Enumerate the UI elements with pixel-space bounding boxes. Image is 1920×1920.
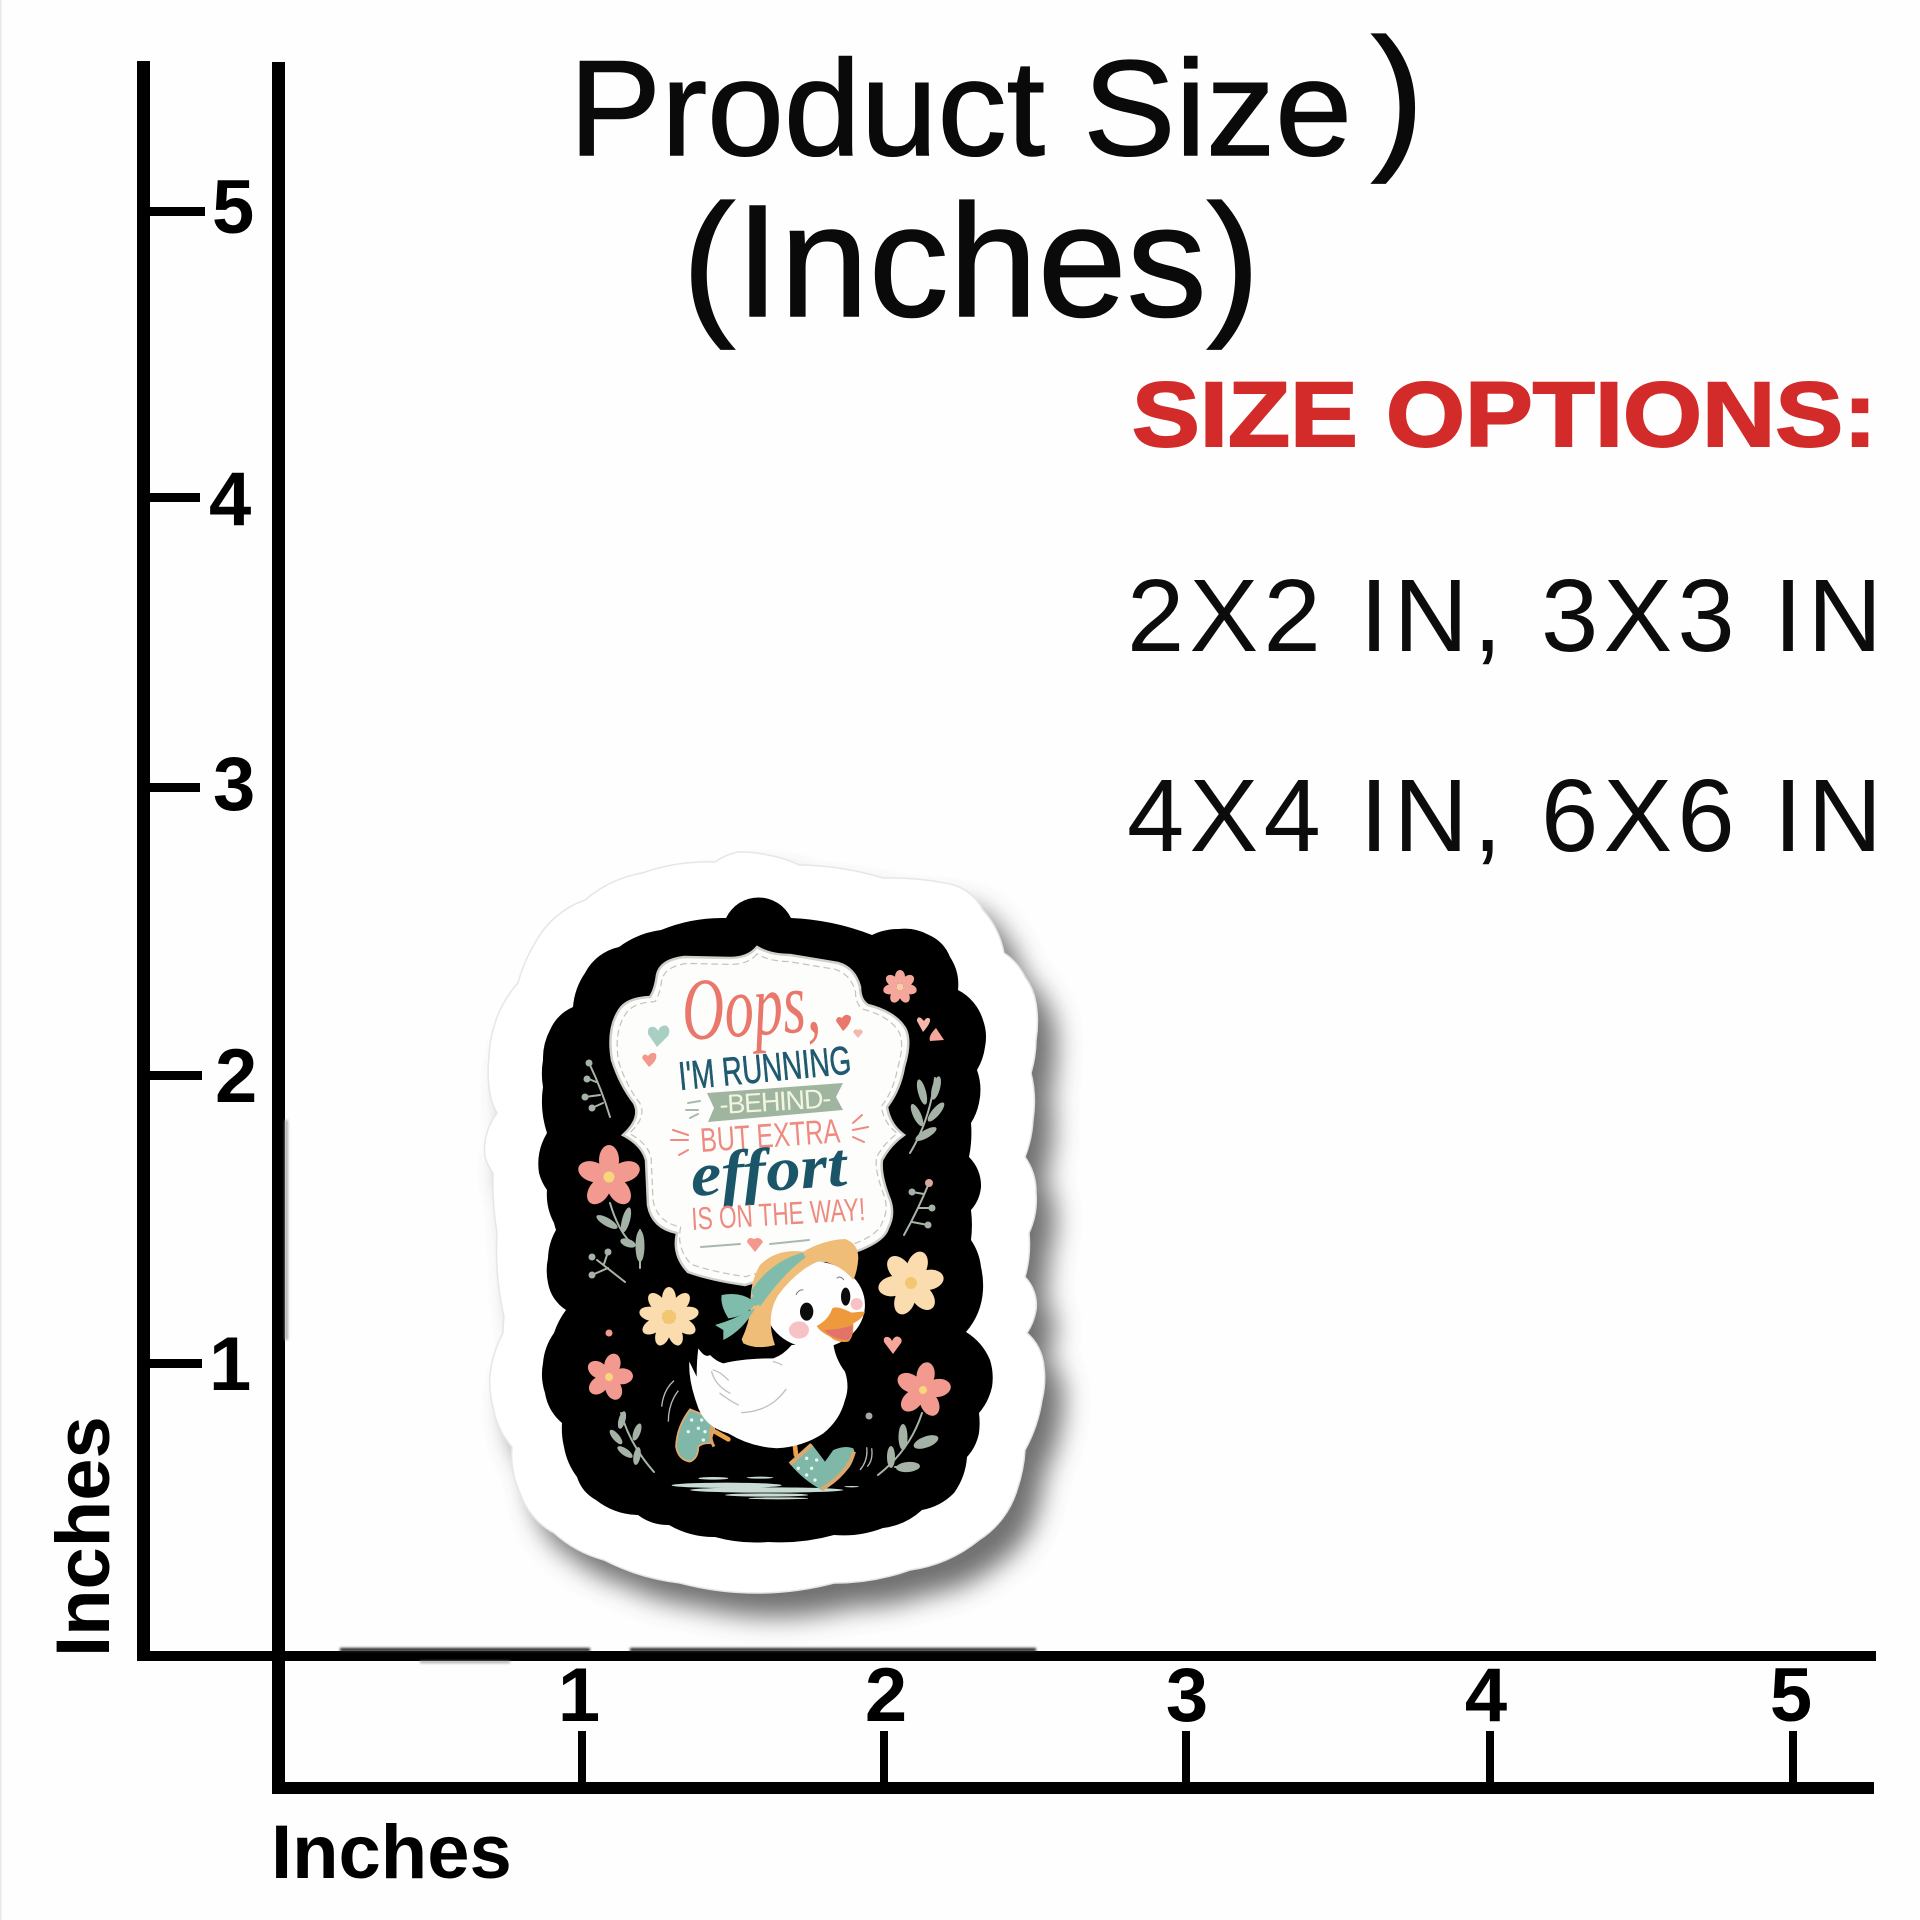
horizontal ruler: 5 (1770, 1653, 1812, 1738)
vertical ruler (137, 61, 257, 1661)
vertical ruler: 2 (215, 1034, 257, 1119)
sprigs (585, 1063, 935, 1475)
horizontal axis label: Inches (271, 1810, 512, 1895)
duck cheeks (789, 1298, 863, 1339)
duck left boot cuff (711, 1423, 714, 1447)
vertical axis label: Inches (41, 1416, 126, 1657)
flower: peach daisy left (638, 1287, 700, 1348)
duck brow marks (796, 1277, 844, 1295)
duck mouth (824, 1325, 853, 1340)
badge lettering: Oops, (679, 954, 823, 1060)
badge lettering: BUT EXTRA (699, 1112, 841, 1160)
badge lettering: -BEHIND- (719, 1083, 832, 1120)
badge shape (610, 947, 908, 1285)
duck eyes (800, 1288, 850, 1321)
duck body (689, 1343, 847, 1448)
duck (662, 1239, 872, 1499)
text: size options row 2: 4X4 IN, 6X6 IN (1127, 758, 1882, 873)
flower: pink lower right (889, 1357, 957, 1423)
horizontal ruler: 1 (558, 1653, 600, 1738)
badge hearts (642, 1015, 863, 1252)
boot polka dots (687, 1418, 818, 1482)
duck ripple puddle (672, 1477, 859, 1499)
badge lettering (677, 954, 866, 1237)
speech badge (610, 947, 908, 1285)
badge lettering: I'M RUNNING (677, 1039, 853, 1099)
vertical ruler: 5 (212, 165, 254, 250)
badge lettering: effort (688, 1131, 851, 1210)
duck beak (817, 1307, 865, 1342)
badge lettering: IS ON THE WAY! (690, 1191, 866, 1237)
axis smudge marks (285, 1120, 1036, 1663)
duck hat (742, 1239, 858, 1347)
horizontal ruler: 2 (865, 1653, 907, 1738)
duck right boot sole (790, 1445, 854, 1489)
duck right boot (790, 1444, 854, 1490)
duck left boot (676, 1409, 717, 1462)
flower: small pink top right (882, 970, 918, 1004)
horizontal ruler: 4 (1465, 1653, 1507, 1738)
flower: large pink left (575, 1145, 643, 1209)
text: size options row 1: 2X2 IN, 3X3 IN (1127, 558, 1882, 673)
horizontal ruler: 3 (1166, 1653, 1208, 1738)
inner vertical axis line (272, 62, 285, 1794)
title: Product Size (569, 32, 1352, 184)
horizontal ruler (272, 1653, 1874, 1794)
duck upper parts (689, 1239, 865, 1448)
sticker black scalloped background (538, 897, 993, 1543)
dots and hearts on black (606, 1017, 944, 1420)
upper horizontal axis line (138, 1651, 1876, 1661)
burst lines (671, 1101, 868, 1247)
heading: size options: SIZE OPTIONS: (1132, 364, 1877, 466)
title: ) (1371, 5, 1424, 184)
vertical ruler: 1 (209, 1322, 251, 1407)
duck bow (715, 1294, 760, 1340)
flower: peach right (868, 1241, 954, 1325)
sticker white die-cut border (485, 852, 1045, 1593)
sticker shadow (504, 876, 1064, 1617)
vertical ruler: 4 (209, 457, 251, 542)
banner: behind (707, 1083, 843, 1122)
sticker (485, 852, 1064, 1617)
duck lower parts (662, 1381, 872, 1499)
duck head (765, 1262, 865, 1348)
vertical ruler: 3 (213, 742, 255, 827)
title (569, 5, 1424, 350)
title: (Inches) (682, 171, 1260, 350)
duck legs (715, 1432, 796, 1455)
duck hat ribbon band (751, 1253, 806, 1307)
duck wing lines (712, 1362, 786, 1413)
duck motion lines (662, 1381, 872, 1470)
flower: pink lower left (578, 1347, 640, 1407)
